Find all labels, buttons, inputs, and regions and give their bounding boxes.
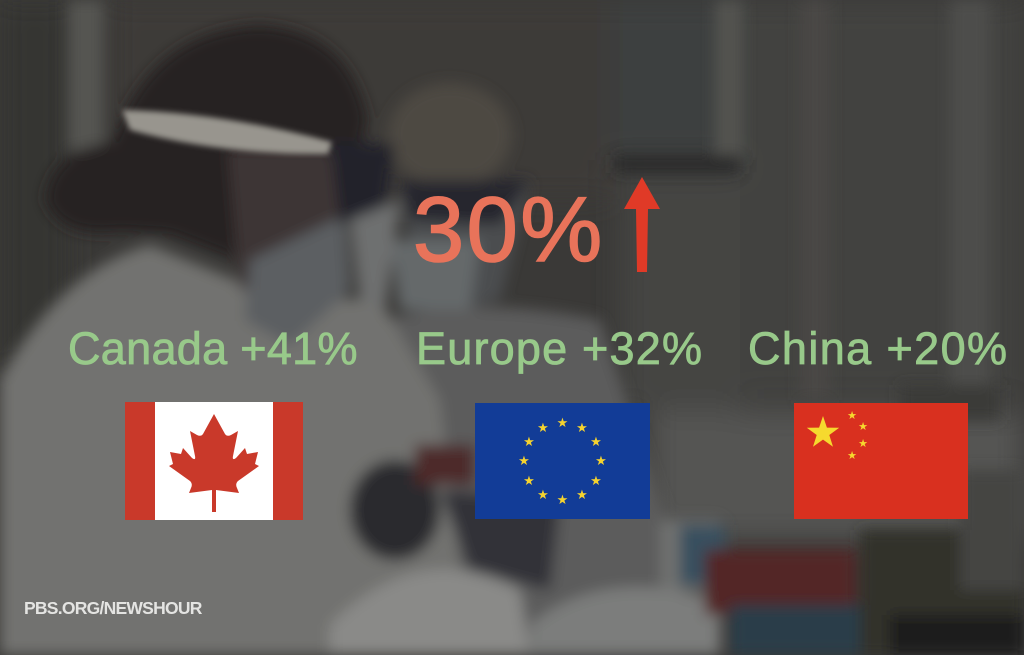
icon: Europe flag: ★ — [523, 435, 535, 450]
back worker — [388, 83, 512, 187]
headline: 30%: 30% — [413, 179, 605, 281]
icon: Europe flag — [475, 403, 650, 519]
icon: Europe flag: ★ — [557, 416, 568, 431]
icon: Europe flag: ★ — [590, 435, 602, 450]
icon: Europe flag: ★ — [576, 421, 588, 436]
icon: China flag: ★ — [847, 449, 857, 462]
icon: Europe flag: ★ — [557, 493, 568, 508]
label: China +20%: China +20% — [748, 323, 1008, 374]
icon: red up arrow — [624, 177, 660, 272]
front worker suit — [0, 245, 470, 655]
hands and lab items — [350, 460, 440, 560]
icon: Europe flag: ★ — [595, 454, 607, 469]
visor — [330, 140, 395, 225]
icon: Europe flag: ★ — [537, 488, 549, 503]
icon: Europe flag: ★ — [537, 421, 549, 436]
label: Canada +41%: Canada +41% — [68, 323, 358, 374]
icon: China flag: ★ — [847, 409, 857, 422]
label: Europe +32%: Europe +32% — [416, 323, 703, 374]
icon: Europe flag: ★ — [590, 474, 602, 489]
icon: China flag: ★ — [858, 420, 868, 433]
icon: China flag — [794, 403, 968, 519]
face — [228, 150, 345, 290]
hair — [45, 25, 368, 260]
icon: China flag: ★ — [858, 437, 868, 450]
icon: Europe flag: ★ — [523, 474, 535, 489]
icon: Europe flag: ★ — [518, 454, 530, 469]
icon: Europe flag: ★ — [576, 488, 588, 503]
source credit: PBS.ORG/NEWSHOUR — [24, 598, 202, 618]
icon: Canada flag — [125, 402, 303, 520]
